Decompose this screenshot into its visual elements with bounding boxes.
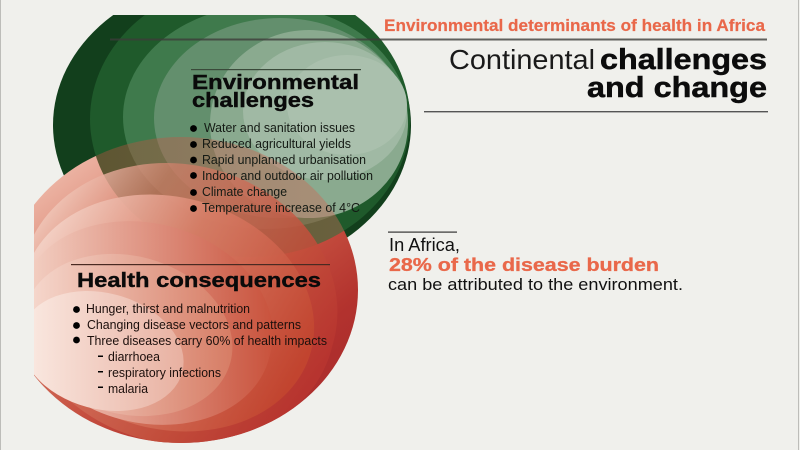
health bullet list: Changing disease vectors and patterns <box>87 318 301 332</box>
callout intro: In Africa, <box>389 235 460 255</box>
health bullet list: Hunger, thirst and malnutrition <box>86 302 250 316</box>
health bullet list: malaria <box>108 382 148 396</box>
main title: challenges <box>600 44 767 76</box>
environmental heading rule <box>191 69 361 70</box>
overlapping circles: green environment and red health <box>34 15 411 443</box>
health bullet list: respiratory infections <box>108 366 221 380</box>
environmental heading: challenges <box>192 90 314 112</box>
callout ending: can be attributed to the environment. <box>388 275 683 294</box>
environmental bullet list <box>190 121 373 215</box>
health bullet list: Three diseases carry 60% of health impacts <box>87 334 327 348</box>
health bullet list <box>73 302 327 396</box>
environmental bullet list: Water and sanitation issues <box>204 121 355 135</box>
panel: health consequences <box>71 264 330 396</box>
environmental heading <box>192 72 359 112</box>
callout: disease burden <box>388 232 683 294</box>
environmental bullet list: Temperature increase of 4°C <box>202 201 360 215</box>
panel: environmental challenges <box>190 69 373 215</box>
health bullet list: diarrhoea <box>108 350 160 364</box>
health heading: Health consequences <box>77 269 321 292</box>
callout highlight: 28% of the disease burden <box>389 255 659 275</box>
callout rule <box>388 232 457 233</box>
header rule <box>110 38 767 40</box>
main title: Continental <box>449 44 595 75</box>
title bottom rule <box>424 111 768 112</box>
environmental heading: Environmental <box>192 72 359 94</box>
health heading rule <box>71 264 330 265</box>
environmental bullet list: Indoor and outdoor air pollution <box>202 169 373 183</box>
supertitle: Environmental determinants of health in Africa <box>384 16 766 35</box>
environmental bullet list: Reduced agricultural yields <box>202 137 351 151</box>
main title: and change <box>587 72 767 104</box>
environmental bullet list: Rapid unplanned urbanisation <box>202 153 366 167</box>
main title <box>449 44 767 104</box>
environmental bullet list: Climate change <box>202 185 287 199</box>
